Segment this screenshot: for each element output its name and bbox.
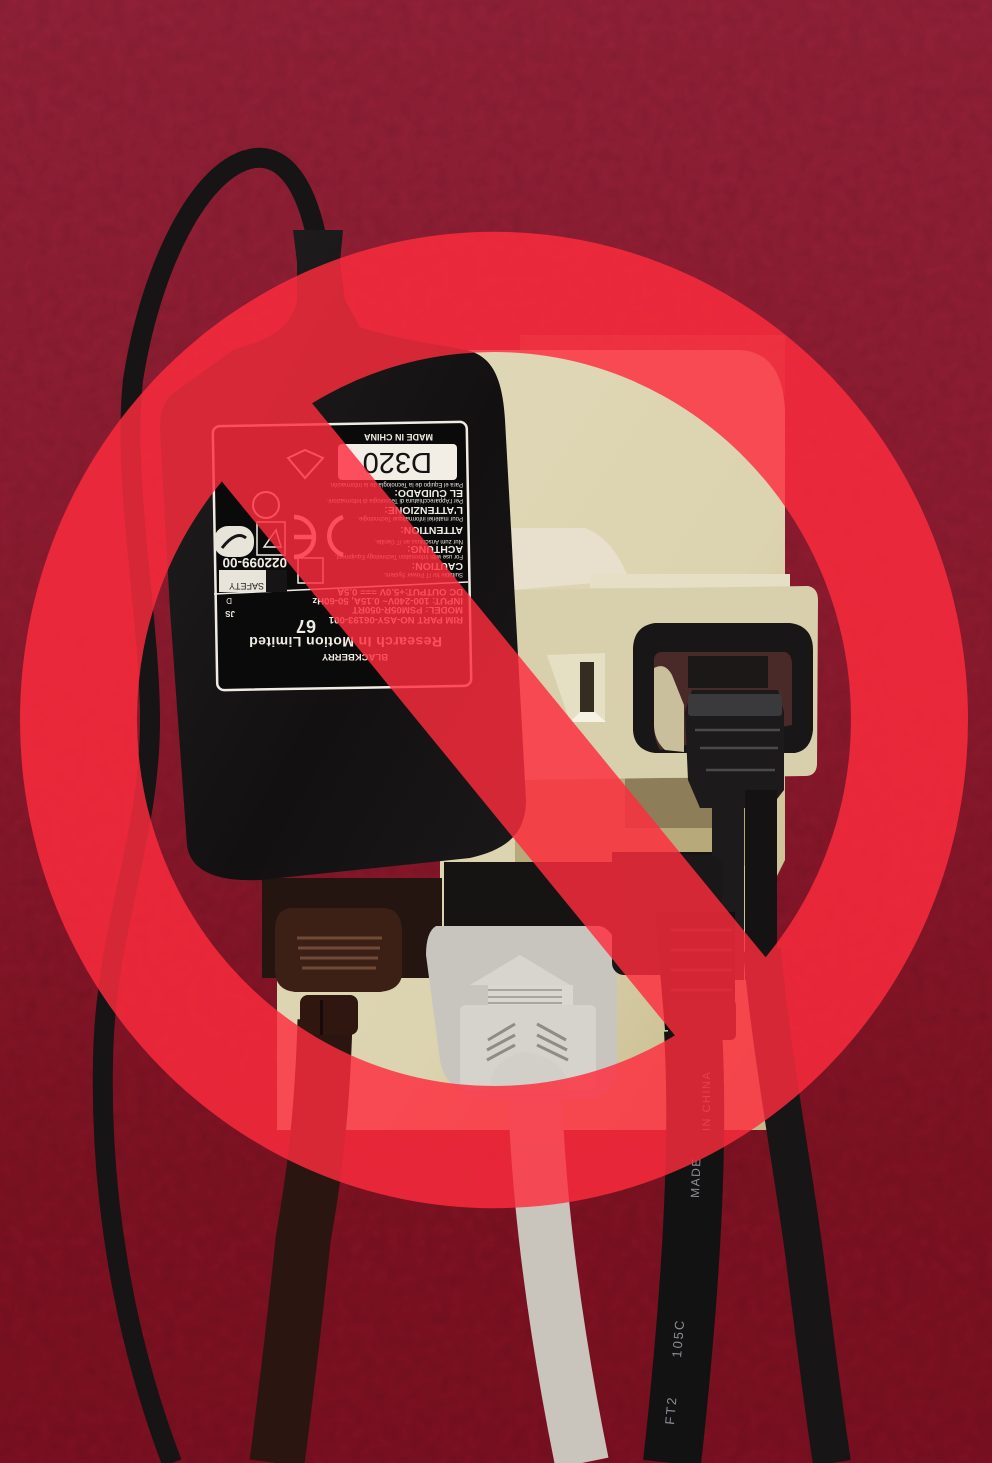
- sign diagonal bar: [165, 325, 830, 1115]
- certification marks: [214, 450, 343, 583]
- label text: ATTENTION:: [400, 524, 463, 536]
- outlet adapter with socket: [515, 586, 818, 780]
- brown plug: [275, 908, 402, 1035]
- label text: Nur zum Anschluss an IT Geräte.: [374, 538, 463, 544]
- label text: [222, 432, 463, 662]
- label text: BLACKBERRY: [321, 651, 388, 662]
- adapter label: [213, 422, 471, 690]
- sign ring: [20, 232, 968, 1208]
- label text: Per l'Apparecchiatura di Tecnologia di Informazioni.: [327, 497, 463, 503]
- label text: JS: [225, 609, 235, 618]
- label text: D: [226, 596, 232, 605]
- cable: black cord with print: FT2: [662, 1395, 680, 1425]
- cable: black cord with print: 105C: [669, 1318, 687, 1358]
- safety mark: SAFETY: [229, 581, 264, 591]
- label text: L'ATTENZIONE:: [384, 504, 463, 516]
- label text: DC OUTPUT:+5.0V === 0.5A: [337, 586, 463, 597]
- cable: long black adapter cord: [103, 158, 316, 1463]
- label text: MADE IN CHINA: [364, 432, 433, 442]
- label text: Suitable for IT Power System.: [383, 571, 463, 577]
- cable: grey cord: [535, 1090, 582, 1463]
- label text: 022099-00: [222, 555, 287, 570]
- label text: D320: [363, 446, 432, 478]
- label text: MODEL: PSM05R-050RT: [352, 604, 463, 615]
- label text: INPUT: 100-240V~ 0.15A, 50-60Hz: [312, 595, 463, 606]
- label text: Research In Motion Limited: [249, 634, 442, 650]
- cable: black cord with print: IN CHINA: [701, 1071, 713, 1131]
- safety mark: [219, 570, 287, 592]
- cable: black cord with print: [662, 1030, 713, 1463]
- label text: For use with Information Technology Equipment.: [334, 553, 463, 559]
- power adapter body: [160, 230, 526, 880]
- label text: Para el Equipo de la Tecnología de la Información.: [329, 481, 463, 487]
- label text: ACHTUNG:: [407, 543, 463, 555]
- black plug top right: [685, 656, 784, 980]
- grey plug: [426, 926, 617, 1100]
- prohibition sign: [20, 232, 968, 1208]
- cable: black cord with print: MADE: [688, 1157, 703, 1198]
- black plug lower right: [612, 855, 736, 1040]
- cable: right black cord: [762, 950, 832, 1463]
- cable: brown cord: [277, 1020, 325, 1463]
- label text: RIM PART NO-ASY-06193-001: [328, 614, 463, 625]
- label text: CAUTION:: [412, 560, 463, 572]
- label text: EL CUIDADO:: [394, 487, 463, 499]
- wall outlet plate: [262, 335, 790, 1130]
- label text: 67: [296, 616, 316, 636]
- label text: Pour matériel informatique Technologie.: [357, 515, 463, 521]
